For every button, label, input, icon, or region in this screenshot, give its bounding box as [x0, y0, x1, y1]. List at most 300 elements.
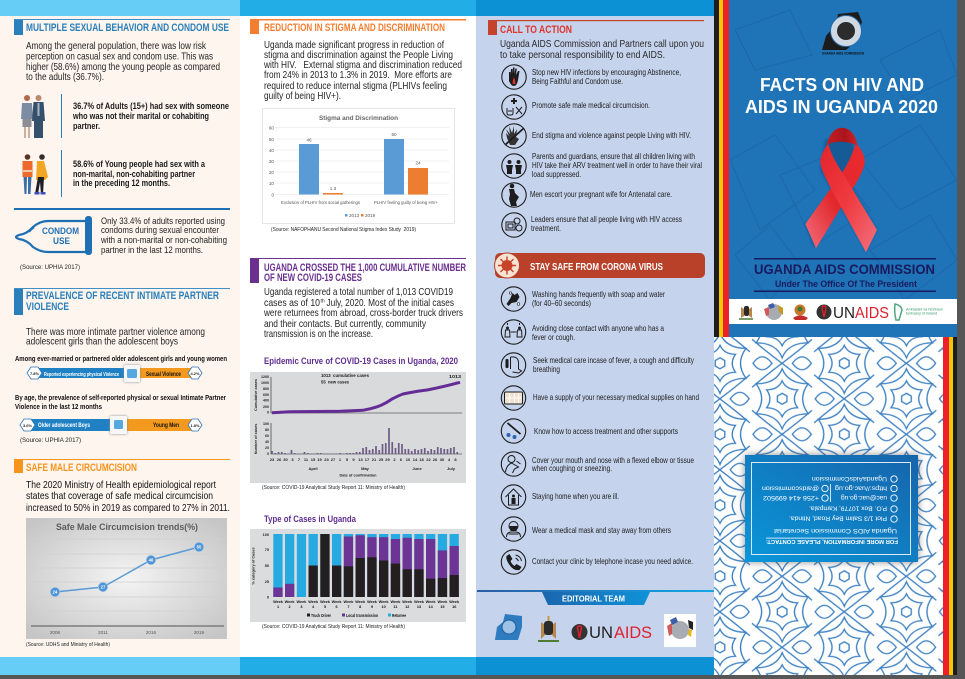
- source: (Source: UPHIA 2017): [20, 264, 80, 271]
- icon: medical care: [501, 353, 526, 377]
- text: adults statistic: [72, 101, 229, 131]
- text: adults statistic: partner.: [73, 121, 100, 131]
- text: stigma: guilty of being HIV+).: [264, 91, 341, 102]
- text: circumcision: states that coverage of safe medical circumcision: [26, 491, 213, 502]
- chart: epidemic curve: 20: [265, 446, 269, 450]
- text: Leaders ensure that all people living with HIV access: [531, 214, 682, 224]
- text: when coughing or sneezing.: [531, 463, 612, 473]
- text: HIV take their ARV treatment well in order to have their viral: [532, 160, 702, 170]
- stacked bar chart: type of cases: 7: [347, 605, 349, 609]
- text: stigma: with HIV. External stigma and discrimination reduced: [263, 60, 462, 71]
- stacked bar chart: type of cases: % category of Cases: [252, 547, 256, 585]
- bar chart: stigma and discrimination: 30: [269, 159, 274, 164]
- chart: epidemic curve: 1013 cumulative cases: [321, 373, 369, 378]
- title: AIDS IN UGANDA 2020: [745, 96, 938, 117]
- upside-down contact details: +256 414 699502: [763, 494, 819, 501]
- text: End stigma and violence against people Living with HIV.: [532, 130, 691, 140]
- text: adults statistic: 36.7% of Adults (15+) had sex with someone: [73, 101, 229, 111]
- banner: editorial team: EDITORIAL TEAM: [562, 594, 625, 604]
- stacked bar chart: type of cases: Week: [426, 600, 436, 604]
- text: load suppressed.: [532, 169, 581, 179]
- icon: red ribbon: [805, 128, 877, 252]
- stacked bar chart: type of cases: 4: [312, 605, 315, 609]
- stacked bars: truck driver: [308, 534, 459, 597]
- text: circumcision: The 2020 Ministry of Health epidemiological report: [26, 480, 216, 491]
- panel: call to action: [476, 0, 714, 675]
- chart: epidemic curve: 22: [426, 457, 431, 462]
- stacked bar chart: type of cases: 16: [452, 605, 456, 609]
- text: Uganda AIDS Commission: [754, 258, 936, 292]
- stacked bar chart: type of cases: Week: [390, 600, 401, 604]
- logo: embassy of Ireland: Embassy of Ireland: [906, 312, 937, 316]
- text: call to action intro: to take personal responsibility to end AIDS.: [500, 50, 665, 61]
- text: condom statistic: with a non-marital or non-cohabiting: [100, 235, 227, 245]
- text: stigma: Uganda made significant progress in reduction of: [264, 40, 444, 51]
- icon: wash hands: [501, 287, 526, 311]
- comparison bar: boys and young men: Older adolescent Boys: [38, 423, 91, 429]
- divider: editorial: [477, 590, 714, 592]
- comparison bar: boys and young men: [20, 416, 202, 434]
- chart: epidemic curve: 18: [419, 457, 424, 462]
- chart: epidemic curve: 25: [379, 457, 384, 462]
- line chart: safe male circumcision trends: 24: [53, 590, 58, 594]
- source: (Source: COVID-19 Analytical Study Report 11: Ministry of Health): [262, 485, 405, 491]
- text: Uganda AIDS Commission: UGANDA AIDS COMMISSION: [754, 261, 935, 277]
- panel: stigma and COVID-19 cases: [240, 0, 476, 675]
- heading: safe male circumcision: [14, 459, 230, 474]
- logo: UNAIDS: UN: [833, 305, 855, 322]
- stacked bar chart: type of cases: Week: [379, 600, 389, 604]
- text: breathing: [533, 364, 560, 374]
- logo: UNAIDS: AIDS: [614, 623, 652, 642]
- text: covid: were returnees from abroad, cross-border truck drivers: [263, 308, 463, 319]
- text: fever or cough.: [532, 332, 575, 342]
- text: covid: cases as of 10: [264, 298, 320, 309]
- icon: condom use: CONDOM: [42, 226, 79, 237]
- divider: [61, 94, 62, 138]
- comparison bar: boys and young men: 3.6%: [23, 424, 33, 428]
- title: [745, 74, 938, 117]
- chart: epidemic curve: 600: [263, 393, 269, 397]
- text: circumcision: [26, 480, 230, 514]
- comparison bar: girls and young women: 4.2%: [190, 372, 200, 376]
- text: covid: transmission is on the increase.: [264, 329, 373, 340]
- text: Men escort your pregnant wife for Antenatal care.: [530, 189, 672, 199]
- line chart: safe male circumcision trends: [26, 518, 227, 639]
- text: Wear a medical mask and stay away from others: [532, 525, 671, 535]
- icon: leaders: [502, 213, 526, 237]
- upside-down contact details: uac@uac.go.ug: [841, 494, 887, 501]
- icon: virus: [494, 253, 520, 278]
- text: stigma: [263, 40, 462, 102]
- chart: epidemic curve: 4: [448, 457, 451, 462]
- text: covid: th: [320, 298, 325, 304]
- stacked bar chart: type of cases: 15: [440, 605, 445, 609]
- chart: epidemic curve: 2: [393, 457, 396, 462]
- line chart: safe male circumcision trends: 2019: [194, 630, 205, 635]
- stacked bar chart: type of cases: 3: [300, 605, 302, 609]
- comparison bar: boys and young men: 1.8%: [190, 424, 200, 428]
- bar chart: stigma and discrimination: 24: [415, 160, 421, 166]
- chart: epidemic curve: 80: [265, 428, 269, 432]
- icon: cough: [501, 452, 526, 476]
- text: Have a supply of your necessary medical supplies on hand: [533, 392, 699, 402]
- chart: epidemic curve: 6: [400, 457, 403, 462]
- panel: back cover pattern: [714, 337, 957, 675]
- chart: epidemic curve: 1013: [449, 374, 462, 379]
- logo: Uganda AIDS Commission: UGANDA AIDS COMMISSION: [822, 52, 864, 56]
- comparison bar: girls and young women: Reported experiencing physical Violence: [44, 372, 119, 378]
- text: Being Faithful and Condom use.: [532, 76, 623, 86]
- chart: epidemic curve: Cumulative cases: [254, 379, 258, 411]
- text: violence intro: adolescent girls than the adolescent boys: [26, 336, 178, 348]
- chart: epidemic curve: Number of cases: [254, 424, 258, 454]
- text: call to action intro: [500, 39, 704, 61]
- icon: telephone: [501, 550, 526, 574]
- bar chart: stigma and discrimination: 46: [306, 138, 312, 142]
- chart: epidemic curve: [250, 372, 466, 483]
- stacked bar chart: type of cases: 9: [371, 605, 373, 609]
- chart: epidemic curve: 3: [291, 457, 294, 462]
- text: [531, 455, 694, 473]
- stacked bar chart: type of cases: 8: [359, 605, 361, 609]
- text: covid: and their contacts. But currently, community: [264, 319, 427, 330]
- chart: epidemic curve: 29: [385, 457, 390, 462]
- line chart: safe male circumcision trends: 2006: [50, 630, 61, 635]
- chart: epidemic curve: July: [447, 466, 456, 471]
- bar chart: stigma and discrimination: Stigma and Discrimnation: [319, 115, 398, 122]
- line chart: safe male circumcision trends: 2016: [146, 630, 157, 635]
- stacked bar chart: type of cases: Week: [449, 600, 460, 604]
- icon: condom use: USE: [53, 236, 70, 247]
- intro text: higher (58.6%) among the young people as compared: [26, 62, 220, 73]
- contact box: [745, 455, 918, 562]
- logo: UNAIDS: [816, 304, 889, 322]
- bar chart: stigma and discrimination: [262, 108, 454, 224]
- text: Cover your mouth and nose with a flexed elbow or tissue: [532, 455, 694, 465]
- comparison bar: boys and young men: Young Men: [153, 423, 179, 429]
- icon: pregnant wife: [502, 183, 526, 207]
- text: Stop new HIV infections by encouraging Abstinence,: [532, 67, 681, 77]
- text: stigma: required to reduce internal stigma (PLHIVs feeling: [264, 81, 447, 92]
- logo: UNAIDS: UN: [589, 623, 613, 642]
- divider: [61, 150, 62, 197]
- stacked bar chart: type of cases: Week: [320, 600, 331, 604]
- line chart: safe male circumcision trends: 27: [101, 584, 106, 590]
- title: FACTS ON HIV AND: [760, 74, 924, 95]
- stacked bars: local transmission: [273, 535, 459, 597]
- text: stigma: stigma and discrimination against the People Living: [264, 50, 453, 61]
- bar chart: stigma and discrimination: 20: [269, 170, 274, 175]
- chart: epidemic curve: 0: [267, 452, 269, 456]
- logo: coat of arms: [739, 306, 753, 319]
- chart: epidemic curve: 800: [263, 387, 269, 391]
- line chart: safe male circumcision trends: 46: [149, 558, 154, 562]
- heading: call to action: [488, 20, 704, 36]
- bar chart: stigma and discrimination: 10: [269, 181, 274, 186]
- upside-down contact details: FOR MORE INFORMATION, PLEASE CONTACT:: [766, 538, 898, 544]
- upside-down contact details: Uganda AIDS Commission Secretariat: [774, 527, 897, 534]
- panel: multiple sexual behaviour, violence and circumcision: [0, 0, 240, 675]
- chart: epidemic curve: 9: [352, 457, 355, 462]
- heading: multiple sexual behavior: [14, 19, 230, 35]
- stacked bar chart: type of cases: Week: [308, 600, 319, 604]
- text: condom statistic: condoms during sexual encounter: [101, 225, 219, 235]
- chart: epidemic curve: 30: [283, 457, 288, 462]
- stacked bar chart: type of cases: 11: [393, 605, 397, 609]
- text: young people statistic: non-marital, non-cohabiting partner: [73, 169, 195, 179]
- icon: circumcision: [502, 95, 526, 119]
- text: Parents and guardians, ensure that all children living with: [532, 151, 695, 161]
- stacked bar chart: type of cases: Local transmission: [346, 613, 378, 618]
- heading: covid cases: [250, 258, 466, 284]
- heading: covid cases: OF NEW COVID-19 CASES: [264, 272, 362, 284]
- icon: stay home: [501, 485, 526, 509]
- heading: intimate partner violence: VIOLENCE: [26, 301, 69, 313]
- chart: epidemic curve: May: [361, 466, 370, 471]
- subheading: by age: By age, the prevalence of self-reported physical or sexual Intimate Partner: [15, 395, 226, 402]
- stacked bar chart: type of cases: 12: [405, 605, 409, 609]
- chart: epidemic curve: 15: [311, 457, 316, 462]
- banner: editorial team: [542, 592, 650, 605]
- chart: epidemic curve: Date of confirmation: [340, 474, 377, 478]
- subheading: epidemic curve: Epidemic Curve of COVID-19 Cases in Uganda, 2020: [264, 356, 458, 367]
- stacked bar chart: type of cases: 5: [324, 605, 326, 609]
- bar chart: stigma and discrimination: 40: [269, 148, 274, 153]
- subheading: by age: Violence in the last 12 months: [15, 404, 102, 411]
- icon: young people: [22, 154, 48, 194]
- intro text: [26, 41, 220, 83]
- panel: cover: [714, 0, 957, 337]
- chart: epidemic curve: 5: [346, 457, 349, 462]
- text: circumcision: increased to 50% in 2019 as compared to 27% in 2011.: [26, 503, 230, 514]
- logo: coat of arms: [538, 616, 559, 641]
- stacked bar chart: type of cases: 50: [265, 564, 269, 568]
- bar chart: stigma and discrimination: PLHIV feeling guilty of being HIV+: [374, 200, 438, 205]
- text: Promote safe male medical circumcision.: [532, 100, 650, 110]
- stacked bar chart: type of cases: Week: [285, 600, 295, 604]
- chart: epidemic curve: 10: [406, 457, 411, 462]
- upside-down contact details: P.O. Box 10779, Kampala.: [809, 504, 887, 512]
- text: [532, 289, 665, 308]
- bar chart: stigma and discrimination: 0: [271, 192, 274, 198]
- stacked bar chart: type of cases: 10: [381, 605, 386, 609]
- chart: epidemic curve: 23: [324, 457, 329, 462]
- comparison bar: girls and young women: [27, 365, 202, 382]
- text: violence intro: [26, 327, 205, 348]
- intro text: Among the general population, there was low risk: [26, 41, 207, 52]
- icon: medical mask: [501, 517, 526, 541]
- bar chart: stigma and discrimination: 50: [269, 137, 274, 142]
- heading: multiple sexual behavior: MULTIPLE SEXUAL BEHAVIOR AND CONDOM USE: [26, 22, 229, 34]
- chart: epidemic curve: 14: [413, 457, 418, 462]
- chart: epidemic curve: 11: [304, 457, 309, 462]
- comparison bar: girls and young women: 7.8%: [30, 372, 40, 376]
- chart: epidemic curve: 60: [265, 434, 269, 438]
- chart: epidemic curve: April: [308, 466, 318, 471]
- text: covid: July, 2020. Most of the initial cases: [326, 298, 454, 309]
- icon: treatment: [501, 419, 526, 443]
- stacked bar chart: type of cases: Week: [414, 600, 425, 604]
- stacked bar chart: type of cases: Week: [402, 600, 413, 604]
- logo: UNAIDS: [572, 623, 652, 642]
- text: Avoiding close contact with anyone who has a: [532, 323, 664, 333]
- text: covid: [263, 287, 463, 340]
- text: (for 40–60 seconds): [532, 298, 591, 308]
- text: Seek medical care incase of fever, a cough and difficulty: [533, 355, 695, 365]
- comparison bar: girls and young women: Sexual Violence: [146, 372, 181, 378]
- line chart: safe male circumcision trends: 2011: [98, 630, 108, 635]
- bar chart: stigma and discrimination: Exclusion of PLHIV from social gatherings: [281, 200, 361, 205]
- stacked bar chart: type of cases: 14: [428, 605, 434, 609]
- stacked bar chart: type of cases: 100: [263, 533, 269, 537]
- icon: end violence: [502, 124, 526, 148]
- logo strip: [729, 299, 957, 324]
- bar chart: stigma and discrimination: 2019: [365, 213, 376, 218]
- chart: epidemic curve: 40: [265, 440, 269, 444]
- heading: intimate partner violence: PREVALENCE OF RECENT INTIMATE PARTNER: [26, 290, 219, 302]
- text: condom statistic: Only 33.4% of adults reported using: [101, 216, 225, 226]
- logo: embassy of Ireland: [895, 304, 943, 320]
- text: treatment.: [531, 223, 561, 233]
- text: Contact your clinic by telephone incase you need advice.: [532, 556, 693, 566]
- heading: covid cases: UGANDA CROSSED THE 1,000 CUMULATIVE NUMBER: [264, 262, 466, 274]
- subheading: type of cases: Type of Cases in Uganda: [264, 514, 357, 525]
- chart: epidemic curve: 1000: [261, 381, 269, 385]
- banner: stay safe from corona virus: STAY SAFE FROM CORONA VIRUS: [530, 262, 663, 273]
- divider: [14, 208, 230, 210]
- banner: stay safe from corona virus: [494, 253, 705, 278]
- logo: partners: [664, 614, 696, 647]
- text: call to action intro: Uganda AIDS Commission and Partners call upon you: [500, 39, 704, 50]
- text: Know how to access treatment and other supports: [534, 426, 678, 436]
- text: [532, 323, 664, 342]
- line chart: safe male circumcision trends: 55: [197, 544, 202, 550]
- stacked bar chart: type of cases: Week: [332, 600, 342, 604]
- stacked bar chart: type of cases: 1: [277, 605, 279, 609]
- chart: epidemic curve: 30: [440, 457, 445, 462]
- heading: reduction in stigma: REDUCTION IN STIGMA AND DISCRIMINATION: [264, 22, 445, 34]
- heading: intimate partner violence: [14, 288, 230, 315]
- chart: epidemic curve: 1: [339, 457, 342, 462]
- subheading: ever-married: Among ever-married or partnered older adolescent girls and young women: [15, 356, 227, 363]
- logo: embassy of Ireland: Ambasáid na hÉireann: [906, 306, 943, 312]
- icon: stop hand: [502, 65, 526, 89]
- stacked bar chart: type of cases: Week: [343, 600, 354, 604]
- stacked bar chart: type of cases: Week: [296, 600, 307, 604]
- stacked bars: returnee: [273, 534, 459, 597]
- upside-down contact details: [762, 475, 898, 544]
- intro text: to the adults (36.7%).: [26, 72, 104, 83]
- source: (Source: UDHS and Ministry of Health): [26, 642, 110, 648]
- chart: epidemic curve: 400: [263, 398, 269, 402]
- stacked bar chart: type of cases: Truck Driver: [311, 613, 331, 618]
- stacked bar chart: type of cases: Week: [437, 600, 448, 604]
- chart: epidemic curve: 27: [331, 457, 336, 462]
- chart: epidemic curve: 0: [267, 410, 269, 414]
- icon: medical supplies: [501, 386, 526, 410]
- chart: epidemic curve: 19: [317, 457, 322, 462]
- stacked bar chart: type of cases: [250, 529, 466, 622]
- chart: epidemic curve: 26: [433, 457, 438, 462]
- upside-down contact details: @aidscommission: [762, 484, 819, 492]
- text: covid: Uganda registered a total number of 1,013 COVID19: [264, 287, 453, 298]
- text: [532, 151, 702, 179]
- logo: UNAIDS: AIDS: [855, 305, 889, 322]
- upside-down contact details: Plot 1/3 Salim Bey Road, Ntinda.: [789, 514, 887, 522]
- icon: children: [502, 154, 526, 178]
- text: [533, 355, 695, 374]
- text: [531, 214, 682, 233]
- stacked bar chart: type of cases: Week: [367, 600, 378, 604]
- stacked bar chart: type of cases: 2: [289, 605, 291, 609]
- bar chart: stigma and discrimination: 50: [391, 132, 397, 137]
- chart: epidemic curve: 26: [277, 457, 282, 462]
- text: stigma: from 24% in 2013 to 1.3% in 2019. More efforts are: [264, 70, 452, 81]
- text: violence intro: There was more intimate partner violence among: [26, 327, 205, 338]
- stacked bar chart: type of cases: 25: [265, 580, 269, 584]
- chart: epidemic curve: 55 new cases: [321, 380, 349, 384]
- icon: distance: [501, 320, 526, 344]
- text: young people statistic: [73, 159, 206, 188]
- source: (Source: NAFOPHANU Second National Stigma Index Study 2019): [271, 227, 416, 233]
- chart: epidemic curve: 100: [263, 422, 269, 426]
- source: (Source: COVID-19 Analytical Study Report 11: Ministry of Health): [262, 624, 405, 630]
- stacked bar chart: type of cases: Returnee: [392, 613, 407, 618]
- chart: epidemic curve: 8: [454, 457, 457, 462]
- text: young people statistic: 58.6% of Young people had sex with a: [73, 159, 206, 169]
- text: Washing hands frequently with soap and water: [532, 289, 665, 299]
- logo: Uganda AIDS Commission: [495, 614, 522, 640]
- stacked bar chart: type of cases: Week: [273, 600, 284, 604]
- logo: Uganda AIDS Commission: [822, 12, 864, 56]
- stacked bar chart: type of cases: Week: [355, 600, 366, 604]
- chart: epidemic curve: 13: [358, 457, 363, 462]
- icon: adults: [21, 95, 45, 138]
- text: condom statistic: partner in the last 12 months.: [101, 245, 203, 255]
- intro text: perception on casual sex and condom use. This was: [26, 52, 213, 62]
- stacked bar chart: type of cases: 13: [417, 605, 421, 609]
- logo: ministry: [793, 304, 808, 320]
- text: Uganda AIDS Commission: Under The Office Of The President: [775, 279, 918, 290]
- line chart: safe male circumcision trends: Safe Male Circumcision trends(%): [56, 522, 198, 532]
- text: adults statistic: who was not their marital or cohabiting: [72, 111, 209, 121]
- logo: partners: [764, 303, 783, 320]
- bar chart: stigma and discrimination: 1.3: [330, 186, 337, 191]
- heading: reduction in stigma: [250, 19, 466, 34]
- stacked bar chart: type of cases: 75: [265, 548, 269, 552]
- stacked bar chart: type of cases: 0: [267, 596, 269, 600]
- upside-down contact details: UgandaAidsCommission: [812, 475, 887, 482]
- chart: epidemic curve: June: [412, 466, 422, 471]
- source: (Source: UPHIA 2017): [20, 437, 81, 444]
- bar chart: stigma and discrimination: 2013: [349, 213, 360, 218]
- icon: condom use: [16, 216, 92, 255]
- text: young people statistic: in the preceding 12 months.: [73, 178, 170, 188]
- subheading: by age: [15, 395, 226, 411]
- stacked bar chart: type of cases: 6: [336, 605, 338, 609]
- chart: epidemic curve: 23: [270, 457, 275, 462]
- bar chart: stigma and discrimination: 60: [269, 126, 274, 130]
- chart: epidemic curve: 17: [365, 457, 370, 462]
- chart: epidemic curve: 200: [263, 405, 269, 409]
- chart: epidemic curve: 7: [298, 457, 301, 462]
- text: [532, 67, 681, 86]
- chart: epidemic curve: 1200: [261, 375, 269, 379]
- heading: safe male circumcision: SAFE MALE CIRCUMCISION: [26, 462, 137, 474]
- upside-down contact details: https://uac.go.ug: [835, 484, 887, 492]
- heading: call to action: CALL TO ACTION: [500, 24, 572, 36]
